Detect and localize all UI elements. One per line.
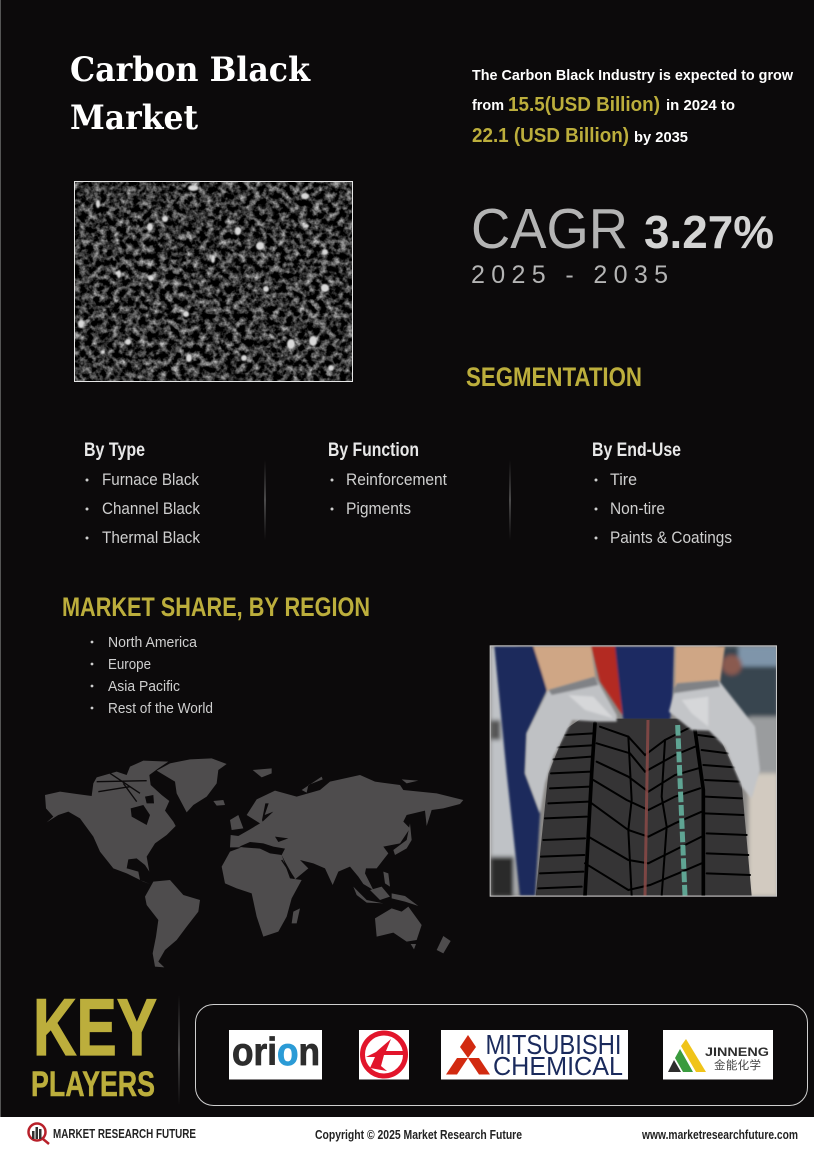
CAGR — [471, 197, 774, 289]
logo: jinneng: 金能化学 — [714, 1058, 761, 1072]
logo: jinneng: JINNENG — [705, 1045, 769, 1059]
segment: by type: Furnace Black — [102, 470, 199, 489]
segment: by end-use: By End-Use — [592, 440, 681, 461]
segment: by function: By Function — [328, 440, 419, 461]
market growth text: 15.5(USD Billion) — [508, 94, 660, 116]
logo: red circle emblem — [359, 1030, 409, 1080]
CAGR: CAGR — [471, 197, 628, 261]
logo: mitsubishi chemical: CHEMICAL — [493, 1051, 623, 1081]
segment: by end-use — [592, 440, 732, 547]
segment: by function — [328, 440, 447, 518]
logo: jinneng — [663, 1030, 773, 1080]
segment: by type: By Type — [84, 440, 145, 461]
title: Carbon Black — [70, 50, 311, 90]
key players heading — [31, 983, 157, 1104]
key players heading: PLAYERS — [31, 1065, 155, 1104]
segment: by end-use: Tire — [610, 470, 637, 489]
footer — [0, 1117, 814, 1150]
logo: mitsubishi chemical: MITSUBISHI — [486, 1029, 622, 1060]
region list: Europe — [108, 656, 151, 673]
segment: by function: Reinforcement — [346, 470, 447, 489]
footer copyright: Copyright © 2025 Market Research Future — [315, 1127, 522, 1142]
region list: Asia Pacific — [108, 678, 180, 695]
heading: market share by region: MARKET SHARE, BY REGION — [62, 592, 370, 622]
market growth text — [472, 67, 793, 147]
title: Market — [70, 98, 198, 138]
market growth text: The Carbon Black Industry is expected to grow — [472, 67, 793, 84]
segment: by type: Thermal Black — [102, 528, 200, 547]
CAGR: 3.27% — [644, 206, 774, 258]
logo: mitsubishi chemical — [441, 1029, 628, 1081]
image: hands holding a tire — [490, 645, 778, 897]
market growth text: 22.1 (USD Billion) — [472, 125, 629, 147]
region list: North America — [108, 634, 198, 651]
footer brand name: MARKET RESEARCH FUTURE — [53, 1126, 196, 1141]
segment: by function: Pigments — [346, 499, 411, 518]
title — [70, 50, 311, 138]
key players panel — [196, 1004, 808, 1106]
logo: orion: orion — [232, 1031, 320, 1074]
footer logo icon — [28, 1124, 49, 1144]
segment: by type: Channel Black — [102, 499, 200, 518]
market growth text: by 2035 — [634, 129, 688, 146]
image: carbon black granules — [74, 182, 352, 382]
market growth text: from — [472, 97, 504, 114]
market growth text: in 2024 to — [666, 97, 735, 114]
region list — [91, 634, 213, 717]
region list: Rest of the World — [108, 700, 213, 717]
world map — [45, 758, 463, 967]
segment: by end-use: Paints & Coatings — [610, 528, 732, 547]
CAGR: 2025 - 2035 — [471, 261, 668, 289]
heading: segmentation: SEGMENTATION — [466, 362, 642, 392]
segment: by end-use: Non-tire — [610, 499, 665, 518]
key players heading: KEY — [33, 983, 157, 1073]
segment: by type — [84, 440, 200, 547]
